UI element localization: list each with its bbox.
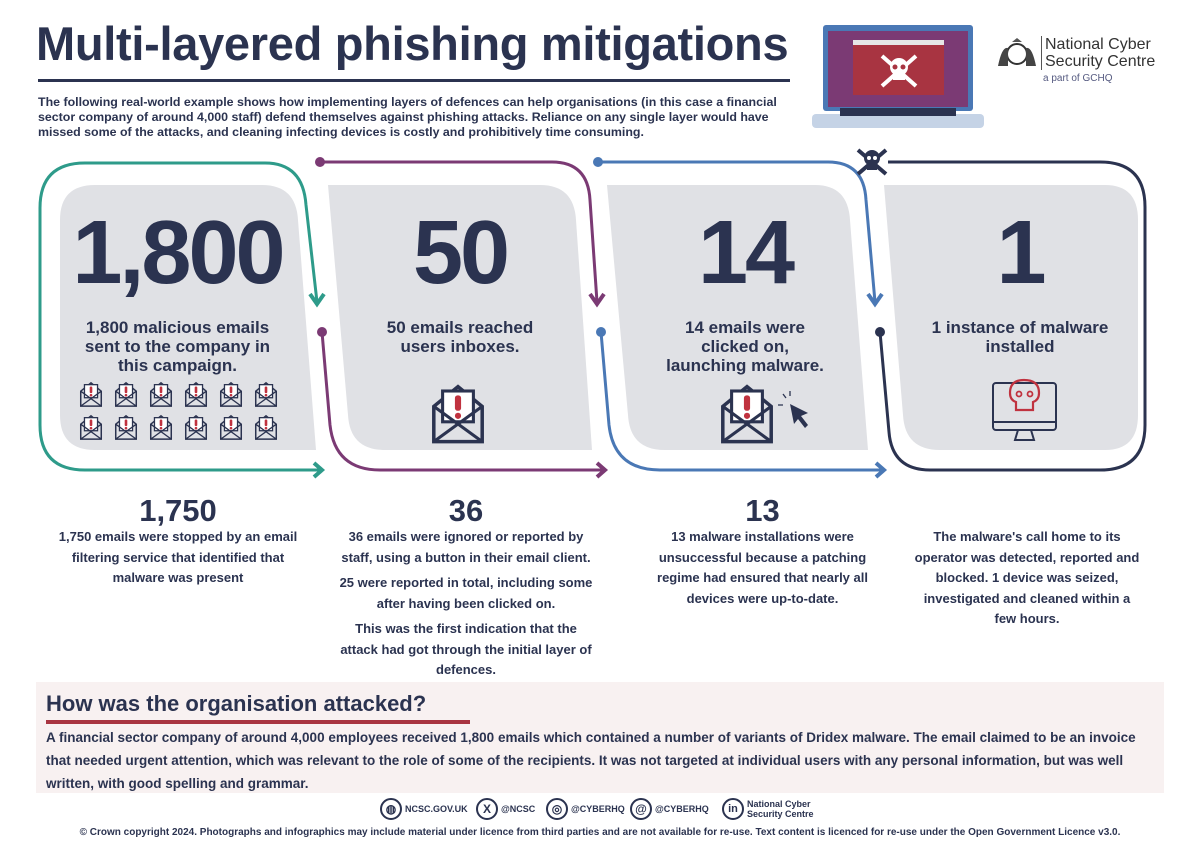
footer social links: @CYBERHQ xyxy=(571,804,625,814)
footer social links: NCSC.GOV.UK xyxy=(405,804,468,814)
outcome: 13: 13 malware installations were unsuccessful because a patching regime had ensured that nearly all devices were up-to-date. xyxy=(657,529,868,606)
panel: 14 xyxy=(607,185,868,450)
footer social links xyxy=(380,798,814,820)
heading: How was the organisation attacked? xyxy=(46,691,426,716)
icon: laptop with skull xyxy=(812,25,984,128)
outcome: detected: The malware's call home to its operator was detected, reported and blocked. 1 device was seized, investigated and cleaned within a few hours. xyxy=(915,529,1139,626)
stat: 1,800: 1,800 xyxy=(72,203,283,303)
footer social links: in xyxy=(728,803,738,815)
outcome: 13 xyxy=(657,493,868,606)
outcome: 36: 25 were reported in total, including some after having been clicked on. xyxy=(340,575,592,610)
stat: 14: 14 xyxy=(698,203,792,303)
stat: 50: 50 emails reached users inboxes. xyxy=(387,318,533,356)
icon: crest xyxy=(998,38,1036,66)
logo: NCSC: Security Centre xyxy=(1045,53,1155,70)
footer social links: X xyxy=(483,802,491,816)
arrow: purple xyxy=(315,157,605,477)
footer social links: ◍ xyxy=(386,802,396,816)
arrow: dark loop xyxy=(875,162,1145,470)
logo: NCSC: National Cyber xyxy=(1045,36,1151,53)
footer social links: @ xyxy=(635,802,647,816)
stat: 14 xyxy=(666,203,824,375)
icon: envelope xyxy=(434,387,482,442)
outcome: 1,750: 1,750 xyxy=(139,493,217,528)
outcome: 36: 36 xyxy=(449,493,483,528)
footer social links: @NCSC xyxy=(501,804,535,814)
body text: A financial sector company of around 4,000 employees received 1,800 emails which contained a number of variants of Dridex malware. The email claimed to be an invoice that needed urgent attention, which was relevant to the role of some of the recipients. It was not targeted at individual users with any personal information, but was well written, with good spelling and grammar. xyxy=(46,730,1136,791)
stat: 1,800: 1,800 malicious emails sent to the company in this campaign. xyxy=(85,318,270,375)
intro text: The following real-world example shows how implementing layers of defences can help organisations (in this case a financial sector company of around 4,000 staff) defend themselves against phishing attacks. Reliance on any single layer would have missed some of the attacks, and cleaning infecting devices is costly and prohibitively time consuming. xyxy=(38,95,777,139)
panel: 50 xyxy=(328,185,592,450)
stat: 1: 1 instance of malware installed xyxy=(932,318,1108,356)
stat: 14: 14 emails were clicked on, launching malware. xyxy=(666,318,824,375)
arrow: blue xyxy=(593,157,884,477)
logo: NCSC: a part of GCHQ xyxy=(1043,73,1112,84)
outcome: 13: 13 xyxy=(745,493,780,528)
footer social links: National Cyber xyxy=(747,799,811,809)
stat: 50: 50 xyxy=(413,203,507,303)
outcome: 1,750: 1,750 emails were stopped by an email filtering service that identified that malware was present xyxy=(59,529,297,585)
panel: 1,800 xyxy=(60,185,316,450)
copyright: © Crown copyright 2024. Photographs and infographics may include material under licence from third parties and are not available for re-use. Text content is licenced for re-use under the Open Government Licence v3.0. xyxy=(80,827,1120,838)
icon: skull and crossbones xyxy=(858,150,886,174)
panel: 1 xyxy=(884,185,1138,450)
stat: 1: 1 xyxy=(996,203,1044,303)
outcome: 36 xyxy=(340,493,592,677)
logo: NCSC xyxy=(998,36,1155,84)
arrow: teal loop xyxy=(40,163,324,477)
outcome: 36: 36 emails were ignored or reported by staff, using a button in their email client. xyxy=(341,529,591,564)
title underline xyxy=(38,79,790,82)
outcome: 1,750 xyxy=(59,493,297,585)
title: Multi-layered phishing mitigations xyxy=(36,17,788,70)
flow diagram xyxy=(38,148,1146,478)
stat: 50 xyxy=(387,203,533,356)
footer social links: Security Centre xyxy=(747,809,814,819)
icon: envelope click xyxy=(723,387,808,442)
icon: monitor with skull xyxy=(993,380,1056,440)
stat: 1,800 xyxy=(72,203,283,375)
footer social links: ◎ xyxy=(552,802,562,816)
stat: 1 xyxy=(932,203,1108,356)
icon: envelopes grid xyxy=(81,383,276,439)
footer social links: @CYBERHQ xyxy=(655,804,709,814)
panel: how was the organisation attacked xyxy=(36,682,1164,793)
outcome: 36: This was the first indication that the attack had got through the initial layer of defences. xyxy=(340,621,592,677)
